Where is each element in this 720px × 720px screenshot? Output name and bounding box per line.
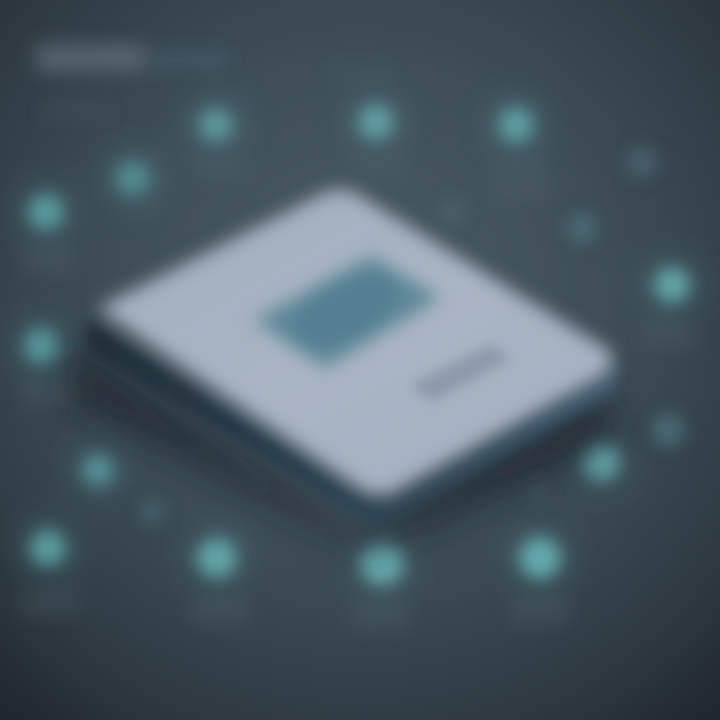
screen: teal panel (254, 256, 440, 368)
device top face (98, 190, 612, 495)
bright nodes (25, 105, 689, 584)
screen: lower text block (410, 345, 512, 402)
device (86, 190, 618, 525)
header block: blurred title (36, 44, 390, 116)
node halos (18, 98, 696, 590)
device side edge (86, 320, 618, 525)
dim nodes (138, 146, 685, 526)
shadow under device (70, 340, 620, 555)
node labels: faint blurred text below nodes (20, 160, 695, 630)
glowing nodes (18, 98, 696, 590)
